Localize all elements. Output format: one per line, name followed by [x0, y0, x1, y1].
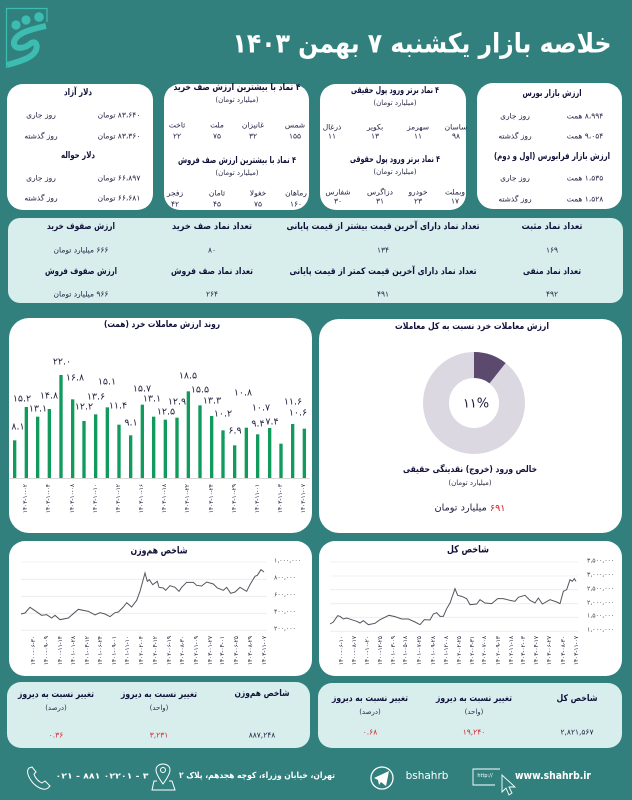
bar chart date labels: ۱۴۰۳-۱۱-۰۷ [301, 484, 307, 513]
bar value labels: ۱۳.۶ [87, 392, 105, 402]
stat: buy queue count [172, 222, 252, 254]
panel: equal weight index chart [9, 541, 312, 676]
y axis labels: ۴۰۰,۰۰۰ [274, 608, 296, 616]
sell queue symbols [166, 188, 307, 208]
stat: positive symbols: تعداد نماد مثبت [522, 222, 582, 232]
heading: equal weight index: شاخص هم‌وزن [130, 546, 188, 556]
bar value labels: ۲۲.۰ [53, 356, 71, 368]
bar chart date labels [23, 484, 307, 513]
x axis date labels: ۱۴۰۱-۰۷-۲۵ [417, 636, 423, 665]
value: net liquidity: ۶۹۱ میلیارد تومان [434, 502, 506, 514]
stat: buy queue value: ارزش صفوف خرید [47, 222, 115, 232]
x axis date labels: ۱۴۰۲-۰۲-۰۴ [139, 636, 145, 665]
buy queue symbols: شمس [285, 120, 305, 130]
x axis date labels: ۱۴۰۲-۰۲-۲۵ [457, 636, 463, 665]
x axis date labels: ۱۴۰۱-۱۲-۰۸ [444, 636, 450, 665]
y axis labels: ۳,۵۰۰,۰۰۰ [587, 558, 614, 564]
bar value labels: ۱۸.۵ [179, 370, 197, 382]
x axis date labels: ۱۴۰۳-۰۴-۰۱ [220, 636, 226, 665]
buy queue symbols: ملت [210, 120, 224, 130]
row: stock today: روز جاری [500, 112, 530, 120]
metric: change units: تغییر نسبت به دیروز [120, 690, 197, 700]
bar value labels: ۱۲.۲ [75, 402, 93, 412]
panel: dollar rates [7, 84, 153, 210]
logo [6, 8, 47, 68]
bar value labels: ۱۳.۳ [203, 396, 221, 406]
row: otc yesterday: ۱،۵۲۸ همت [567, 194, 603, 204]
x axis date labels: ۱۴۰۱-۰۴-۱۲ [85, 636, 91, 665]
gridlines and line chart [330, 562, 578, 631]
x axis date labels: ۱۴۰۳-۱۱-۰۷ [262, 636, 268, 665]
y axis labels: ۲,۵۰۰,۰۰۰ [587, 586, 614, 592]
panel: retail share donut [319, 319, 622, 533]
metric: total index value: ۲,۸۲۱,۵۶۷ [561, 728, 593, 736]
panel: retail trading trend [9, 318, 312, 533]
legal inflow symbols: ۳۱ [376, 196, 384, 206]
panel: total index summary [318, 683, 622, 748]
x axis date labels: ۱۴۰۱-۰۵-۱۸ [403, 636, 409, 665]
x axis date labels: ۱۴۰۳-۱۱-۰۷ [574, 636, 580, 665]
bar chart date labels: ۱۴۰۳-۱۰-۲۹ [232, 484, 238, 513]
bar value labels: ۸.۱ [11, 422, 25, 432]
legal inflow symbols: ۱۷ [451, 196, 459, 206]
x axis date labels: ۱۴۰۱-۰۹-۰۱ [112, 636, 118, 665]
bar value labels: ۶.۹ [228, 426, 242, 436]
bar chart date labels: ۱۴۰۳-۱۰-۱۸ [162, 484, 168, 513]
bar chart date labels: ۱۴۰۳-۱۰-۰۸ [70, 484, 76, 513]
buy queue symbols: ثاخت [169, 120, 185, 130]
y axis labels: ۳,۰۰۰,۰۰۰ [587, 572, 614, 578]
row: free dollar yesterday: روز گذشته [24, 132, 58, 140]
sell queue symbols: خغولا [250, 188, 267, 198]
y axis labels: ۸۰۰,۰۰۰ [274, 574, 296, 582]
bar value labels: ۹.۴ [251, 418, 265, 430]
subheading: buy queue unit: (میلیارد تومان) [215, 96, 259, 104]
subheading: real inflow unit: (میلیارد تومان) [373, 99, 417, 107]
donut chart: ۱۱% [463, 396, 489, 412]
bar value labels: ۱۵.۷ [133, 384, 151, 394]
bar value labels: ۱۰.۶ [289, 408, 307, 418]
x axis date labels: ۱۴۰۰-۰۶-۱۰ [339, 636, 345, 665]
heading: top buy queues: ۴ نماد با بیشترین ارزش صف خرید [174, 83, 301, 93]
stat: buy queue value: ۶۶۶ میلیارد تومان [54, 246, 108, 254]
heading: stock market value: ارزش بازار بورس [522, 89, 582, 99]
address: تهران، خیابان وزراء، کوچه هجدهم، پلاک ۲ [179, 771, 335, 781]
heading: remittance dollar: دلار حواله [61, 151, 95, 161]
y axis labels: ۱,۵۰۰,۰۰۰ [587, 612, 614, 620]
stat: sell queue count: ۲۶۴ [206, 290, 218, 298]
legal inflow symbols: ۲۳ [414, 196, 422, 206]
stat: sell queue value: ۹۶۶ میلیارد تومان [54, 290, 108, 298]
panel: market statistics [8, 218, 623, 303]
row: stock yesterday [498, 132, 603, 140]
x axis date labels: ۱۴۰۰-۰۶-۳۰ [31, 636, 37, 665]
x axis date labels: ۱۴۰۲-۰۹-۱۳ [496, 636, 502, 665]
x axis date labels: ۱۴۰۲-۰۸-۳۰ [180, 636, 186, 665]
stat: buy queue count: ۸۰ [208, 246, 216, 254]
metric: total index value: شاخص کل [556, 694, 598, 704]
y axis labels: ۶۰۰,۰۰۰ [274, 592, 296, 598]
stat: sell queue value [45, 267, 117, 298]
stat: sell queue value: ارزش صفوف فروش [45, 267, 117, 277]
real inflow symbols: بکویر [366, 122, 383, 132]
subheading: liquidity unit: (میلیارد تومان) [448, 479, 492, 487]
metric: change units [435, 694, 512, 736]
bar value labels: ۷.۴ [265, 416, 279, 428]
x axis date labels: ۱۴۰۰-۱۱-۱۴ [58, 636, 64, 665]
stat: positive symbols [522, 222, 582, 254]
metric: change units [120, 690, 197, 740]
bar chart date labels: ۱۴۰۳-۱۰-۱۶ [139, 484, 145, 513]
real inflow symbols: ذرغال [323, 122, 341, 132]
bar value labels: ۱۵.۵ [191, 384, 209, 396]
x axis date labels: ۱۴۰۰-۰۹-۰۹ [44, 636, 50, 665]
gridlines and line chart [21, 562, 267, 630]
x axis date labels: ۱۴۰۱-۱۱-۱۰ [125, 636, 131, 665]
bar value labels: ۱۶.۸ [66, 372, 84, 384]
x axis date labels: ۱۴۰۲-۰۴-۱۲ [153, 636, 159, 665]
legal inflow symbols [325, 188, 465, 206]
x axis date labels: ۱۴۰۰-۱۰-۲۰ [365, 636, 371, 665]
sell queue symbols: ۴۲ [171, 200, 179, 208]
icon: map pin [152, 764, 175, 790]
heading: real money inflow: ۴ نماد برتر ورود پول حقیقی [351, 86, 439, 96]
telegram handle: bshahrb [406, 770, 449, 782]
legal inflow symbols: ۳۰ [334, 196, 342, 206]
bar value labels: ۱۲.۵ [157, 406, 175, 418]
stat: last below close: ۴۹۱ [377, 290, 389, 298]
row: remittance yesterday [24, 194, 140, 202]
bar value labels: ۱۵.۲ [13, 394, 31, 404]
panel: total index chart [319, 541, 622, 676]
heading: free dollar: دلار آزاد [64, 86, 92, 98]
metric: change units: تغییر نسبت به دیروز [435, 694, 512, 704]
legal inflow symbols: وبملت [445, 188, 465, 196]
phone number: ۰۲۱ - ۸۸۱ ۰۲۲۰۱ - ۳ [56, 772, 149, 780]
heading: donut: ارزش معاملات خرد نسبت به کل معاملات [395, 322, 549, 332]
row: otc today: ۱،۵۳۵ همت [567, 174, 603, 182]
stat: positive symbols: ۱۶۹ [546, 246, 558, 254]
bar value labels: ۱۳.۱ [143, 394, 161, 404]
x axis date labels: ۱۴۰۳-۰۸-۲۹ [248, 636, 254, 665]
row: free dollar today [26, 110, 140, 120]
panel: market value [477, 83, 622, 209]
stat: last above close: تعداد نماد دارای آخرین قیمت بیشتر از قیمت پایانی [286, 220, 480, 232]
x axis date labels: ۱۴۰۲-۰۷-۰۸ [482, 636, 488, 665]
y axis labels [587, 558, 614, 634]
sell queue symbols: ثامان [209, 188, 225, 198]
metric: change percent: ۰.۳۶ [49, 730, 63, 740]
bar chart date labels: ۱۴۰۳-۱۰-۱۰ [93, 484, 99, 513]
buy queue symbols: ۲۲ [173, 132, 181, 140]
row: remittance today [26, 174, 140, 182]
row: free dollar today: روز جاری [26, 110, 56, 120]
metric: total index value [556, 694, 598, 736]
real inflow symbols: ساسان [445, 122, 467, 132]
heading: net real liquidity: خالص ورود (خروج) نقدینگی حقیقی [403, 463, 537, 475]
metric: change percent: تغییر نسبت به دیروز [331, 694, 408, 704]
bar chart date labels: ۱۴۰۳-۱۱-۰۱ [255, 484, 261, 513]
x axis date labels: ۱۴۰۳-۰۴-۱۷ [534, 636, 540, 665]
stat: last below close: تعداد نماد دارای آخرین قیمت کمتر از قیمت پایانی [290, 265, 476, 277]
real inflow symbols: ۱۳ [371, 132, 379, 140]
real inflow symbols: سهرمز [406, 122, 429, 132]
sell queue symbols: ۱۶۰ [290, 200, 302, 208]
buy queue symbols: غانیزان [242, 120, 264, 130]
y axis labels [274, 558, 301, 632]
x axis date labels: ۱۴۰۲-۰۴-۳۱ [470, 636, 476, 665]
bar value labels: ۱۰.۸ [234, 388, 252, 398]
metric: equal weight value: شاخص هم‌وزن [234, 689, 290, 699]
metric: equal weight value [234, 689, 290, 740]
sell queue symbols: ۷۵ [254, 200, 262, 208]
stat: negative symbols: ۴۹۲ [546, 290, 558, 298]
subheading: legal inflow unit: (میلیارد تومان) [373, 168, 417, 176]
row: remittance yesterday: ۶۶،۶۸۱ تومان [98, 194, 140, 202]
bar chart date labels: ۱۴۰۳-۱۰-۲۴ [209, 484, 215, 513]
bar value labels: ۱۰.۲ [214, 408, 232, 420]
bar chart date labels: ۱۴۰۳-۱۰-۱۲ [116, 484, 122, 513]
heading: top sell queues: ۴ نماد با بیشترین ارزش صف فروش [178, 156, 296, 166]
row: remittance today: ۶۶،۸۹۷ تومان [98, 174, 140, 182]
x axis date labels: ۱۴۰۳-۰۸-۳۰ [561, 636, 567, 665]
icon: telegram [371, 767, 393, 789]
icon: phone [28, 767, 50, 789]
sell queue symbols: زفجر [166, 188, 183, 198]
buy queue symbols: ۳۲ [249, 132, 257, 140]
y axis labels: ۱,۰۰۰,۰۰۰ [587, 626, 614, 634]
bar value labels: ۱۱.۴ [109, 400, 127, 412]
row: free dollar today: ۸۳،۶۴۰ تومان [98, 110, 140, 120]
stat: sell queue count: تعداد نماد صف فروش [171, 267, 253, 277]
metric: change units: (واحد) [150, 704, 169, 712]
website: www.shahrb.ir [515, 770, 592, 782]
bar value labels: ۱۲.۹ [168, 396, 186, 408]
y axis labels: ۲,۰۰۰,۰۰۰ [587, 600, 614, 606]
y axis labels: ۱,۰۰۰,۰۰۰ [274, 558, 301, 564]
row: free dollar yesterday: ۸۳،۳۶۰ تومان [98, 132, 140, 140]
stat: last above close: ۱۳۴ [377, 246, 389, 254]
x axis date labels: ۱۴۰۲-۱۱-۰۹ [194, 636, 200, 665]
x axis date labels: ۱۴۰۳-۰۱-۲۷ [208, 636, 214, 665]
stat: last below close [290, 265, 476, 298]
stat: last above close [286, 220, 480, 254]
bar value labels: ۱۰.۷ [252, 402, 270, 414]
buy queue symbols [169, 120, 305, 140]
metric: change percent: تغییر نسبت به دیروز [17, 690, 94, 700]
panel: equal weight index summary [7, 682, 310, 748]
icon: web cursor: http:// [477, 773, 493, 779]
metric: change percent: (درصد) [359, 708, 381, 716]
bar value labels: ۱۳.۱ [29, 404, 47, 414]
x axis date labels: ۱۴۰۰-۱۲-۲۵ [378, 636, 384, 665]
stat: negative symbols [523, 267, 581, 298]
metric: change percent: ۰.۶۸ [363, 728, 377, 736]
heading: trend chart: روند ارزش معاملات خرد (همت) [104, 320, 220, 330]
bar chart date labels: ۱۴۰۳-۱۱-۰۳ [278, 484, 284, 513]
icon: web cursor [473, 769, 515, 795]
row: otc today [500, 174, 603, 182]
heading: legal money inflow: ۴ نماد برتر ورود پول حقوقی [350, 155, 440, 165]
stat: sell queue count [171, 267, 253, 298]
x axis date labels: ۱۴۰۳-۰۲-۰۳ [521, 636, 527, 665]
x axis date labels: ۱۴۰۳-۰۶-۲۷ [547, 636, 553, 665]
stat: buy queue value [47, 222, 115, 254]
donut chart [436, 352, 512, 441]
row: otc today: روز جاری [500, 174, 530, 182]
bar chart date labels: ۱۴۰۳-۱۰-۲۲ [185, 484, 191, 513]
metric: change units: ۳,۲۳۱ [150, 730, 168, 740]
legal inflow symbols: شفارس [325, 188, 351, 196]
row: free dollar yesterday [24, 132, 140, 140]
metric: equal weight value: ۸۸۷,۲۴۸ [249, 730, 275, 740]
metric: change units: ۱۹,۲۴۰ [463, 728, 485, 736]
sell queue symbols: ۴۵ [213, 200, 221, 208]
x axis date labels [339, 636, 580, 665]
x axis date labels [31, 636, 268, 665]
real inflow symbols [323, 122, 467, 140]
real inflow symbols: ۱۱ [328, 132, 336, 140]
bar chart date labels: ۱۴۰۳-۱۰-۰۲ [23, 484, 29, 513]
legal inflow symbols: دزاگرس [367, 188, 393, 196]
row: remittance today: روز جاری [26, 174, 56, 182]
stat: negative symbols: تعداد نماد منفی [523, 267, 581, 277]
bar value labels [11, 356, 307, 436]
bar value labels: ۱۵.۱ [98, 376, 116, 388]
panel: top queues [164, 83, 309, 210]
stat: buy queue count: تعداد نماد صف خرید [172, 222, 252, 232]
x axis date labels: ۱۴۰۰-۰۸-۱۷ [352, 636, 358, 665]
row: remittance yesterday: روز گذشته [24, 194, 58, 202]
row: stock today [500, 112, 603, 120]
y axis labels: ۲۰۰,۰۰۰ [274, 626, 296, 632]
bar value labels: ۱۱.۶ [284, 396, 302, 408]
metric: change percent [17, 690, 94, 740]
bar value labels: ۱۴.۸ [40, 390, 58, 402]
buy queue symbols: ۱۵۵ [289, 132, 301, 140]
sell queue symbols: رماهان [285, 188, 307, 198]
x axis date labels: ۱۴۰۲-۰۶-۱۹ [167, 636, 173, 665]
row: otc yesterday: روز گذشته [498, 194, 532, 204]
row: stock yesterday: ۹،۰۵۴ همت [567, 132, 603, 140]
heading: total index: شاخص کل [447, 544, 489, 556]
panel: money flow [320, 84, 467, 210]
metric: change percent: (درصد) [45, 704, 67, 712]
x axis date labels: ۱۴۰۱-۰۹-۲۸ [431, 636, 437, 665]
legal inflow symbols: خودرو [407, 188, 428, 196]
bar chart date labels: ۱۴۰۳-۱۰-۰۴ [46, 484, 52, 513]
row: otc yesterday [498, 194, 603, 204]
row: stock yesterday: روز گذشته [498, 132, 532, 140]
x axis date labels: ۱۴۰۲-۱۱-۱۸ [509, 636, 515, 665]
x axis date labels: ۱۴۰۱-۰۶-۲۴ [98, 636, 104, 665]
x axis date labels: ۱۴۰۱-۰۱-۲۸ [71, 636, 77, 665]
bar value labels: ۹.۱ [124, 418, 138, 428]
real inflow symbols: ۹۸ [452, 132, 460, 140]
buy queue symbols: ۷۵ [213, 132, 221, 140]
x axis date labels: ۱۴۰۱-۰۳-۰۹ [391, 636, 397, 665]
metric: change units: (واحد) [465, 708, 484, 716]
x axis date labels: ۱۴۰۳-۰۶-۲۵ [234, 636, 240, 665]
bar chart [9, 375, 309, 479]
metric: change percent [331, 694, 408, 736]
subheading: sell queue unit: (میلیارد تومان) [215, 169, 259, 177]
row: stock today: ۸،۹۹۴ همت [567, 112, 603, 120]
real inflow symbols: ۱۱ [414, 132, 422, 140]
